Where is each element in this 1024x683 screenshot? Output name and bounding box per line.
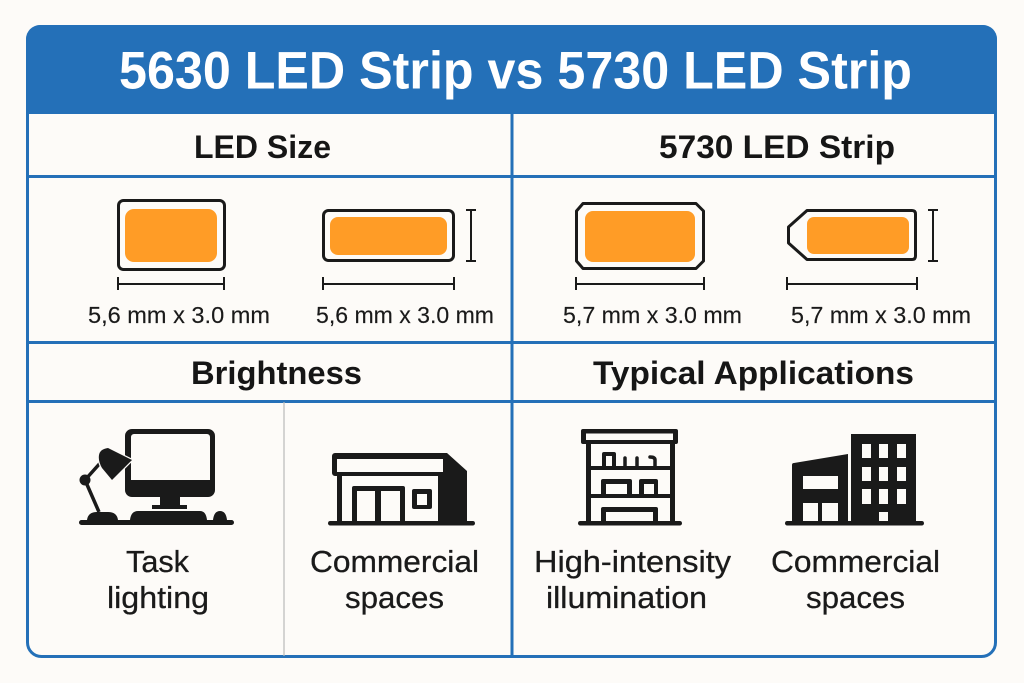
LED diagram: 5630 side [316,210,494,328]
label: High-intensity illumination: High-intensity [534,544,732,579]
dimension label: 5,7 mm x 3.0 mm [791,302,971,328]
label: Commercial spaces: spaces [345,580,444,615]
icon: desk lamp and monitor [79,429,234,525]
heading: Brightness: Brightness [191,355,362,391]
icon: storefront [328,453,475,526]
label: High-intensity illumination [534,544,732,615]
heading: Typical Applications: Typical Applications [593,355,914,391]
label: Task lighting: lighting [107,580,209,615]
dimension label: 5,7 mm x 3.0 mm [563,302,742,328]
label: High-intensity illumination: illumination [546,580,707,615]
label: Commercial spaces [310,544,479,615]
label: Commercial spaces (right): spaces [806,580,905,615]
heading: LED Size: LED Size [194,129,331,165]
LED diagram: 5730 side [787,210,971,328]
dimension label: 5,6 mm x 3.0 mm [88,302,270,328]
icon: multi-storey shop [578,429,682,526]
dimension label: 5,6 mm x 3.0 mm [316,302,494,328]
title: 5630 LED Strip vs 5730 LED Strip [119,42,912,100]
icon: office buildings [785,434,924,526]
LED diagram: 5730 front [563,204,742,328]
label: Commercial spaces (right): Commercial [771,544,940,579]
header banner [26,25,997,112]
label: Commercial spaces: Commercial [310,544,479,579]
label: Task lighting [107,544,209,615]
label: Commercial spaces (right) [771,544,940,615]
LED diagram: 5630 front [88,200,270,328]
heading: 5730 LED Strip: 5730 LED Strip [659,129,895,165]
label: Task lighting: Task [126,544,189,579]
